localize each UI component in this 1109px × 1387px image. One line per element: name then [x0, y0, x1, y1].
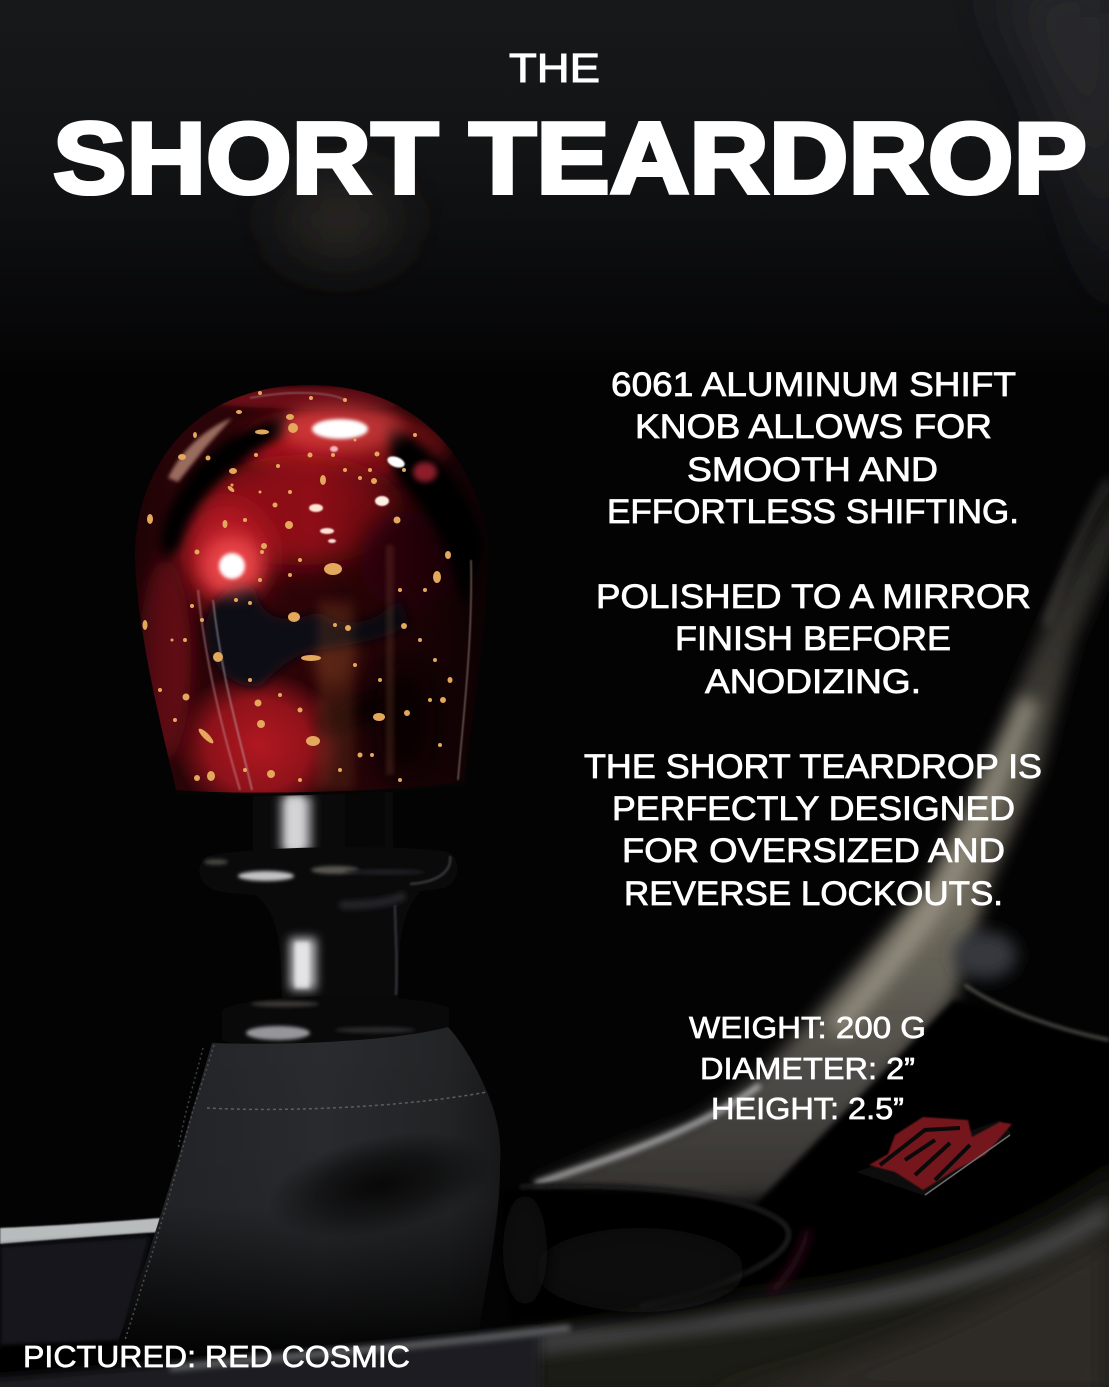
- specifications: HEIGHT: 2.5”: [711, 1091, 904, 1126]
- description: paragraph three: FOR OVERSIZED AND: [622, 832, 1005, 870]
- background: carbon panel and lower console: [0, 931, 1109, 1387]
- specifications: [689, 1010, 926, 1126]
- background: shifter bezel ring: [500, 1185, 808, 1322]
- title: main line: SHORT TEARDROP: [53, 103, 1087, 215]
- collar ring: [199, 847, 457, 896]
- red base areas: [240, 409, 450, 481]
- specifications: DIAMETER: 2”: [700, 1051, 915, 1086]
- left pale reflection: [168, 418, 232, 482]
- description: paragraph two: FINISH BEFORE: [675, 620, 951, 658]
- description: paragraph three: THE SHORT TEARDROP IS: [584, 748, 1042, 786]
- description: paragraph one: KNOB ALLOWS FOR: [635, 408, 992, 446]
- description: paragraph three: PERFECTLY DESIGNED: [612, 790, 1015, 828]
- lower collar: [222, 996, 449, 1047]
- description: paragraph one: 6061 ALUMINUM SHIFT: [611, 366, 1016, 404]
- knob base edge: [176, 783, 466, 794]
- background: silver centre-console arc: [531, 470, 1109, 1210]
- specifications: WEIGHT: 200 G: [689, 1010, 926, 1045]
- description: paragraph three: [584, 748, 1042, 913]
- highlights: [278, 404, 402, 452]
- foreground console lip: [0, 1328, 570, 1387]
- description: paragraph one: EFFORTLESS SHIFTING.: [607, 493, 1019, 531]
- description: paragraph one: SMOOTH AND: [687, 451, 938, 489]
- shifter: shaft and collars: [199, 792, 457, 1047]
- description: paragraph two: ANODIZING.: [705, 663, 921, 701]
- neck: [250, 892, 420, 1000]
- description: paragraph three: REVERSE LOCKOUTS.: [624, 875, 1003, 913]
- vertical reflections: [198, 590, 240, 790]
- description: paragraph two: [596, 578, 1031, 701]
- black swirls: [160, 415, 290, 560]
- shift knob: red cosmic: [135, 385, 487, 796]
- icon: STI badge: [856, 1117, 1012, 1196]
- description: paragraph two: POLISHED TO A MIRROR: [596, 578, 1031, 616]
- title: [53, 45, 1087, 215]
- description: paragraph one: [607, 366, 1019, 531]
- gold flakes: [142, 391, 452, 782]
- title: small line: THE: [509, 45, 600, 91]
- pictured caption: PICTURED: RED COSMIC: [23, 1339, 410, 1374]
- shifter: leather boot: [111, 1027, 547, 1359]
- upper shaft: [253, 792, 393, 854]
